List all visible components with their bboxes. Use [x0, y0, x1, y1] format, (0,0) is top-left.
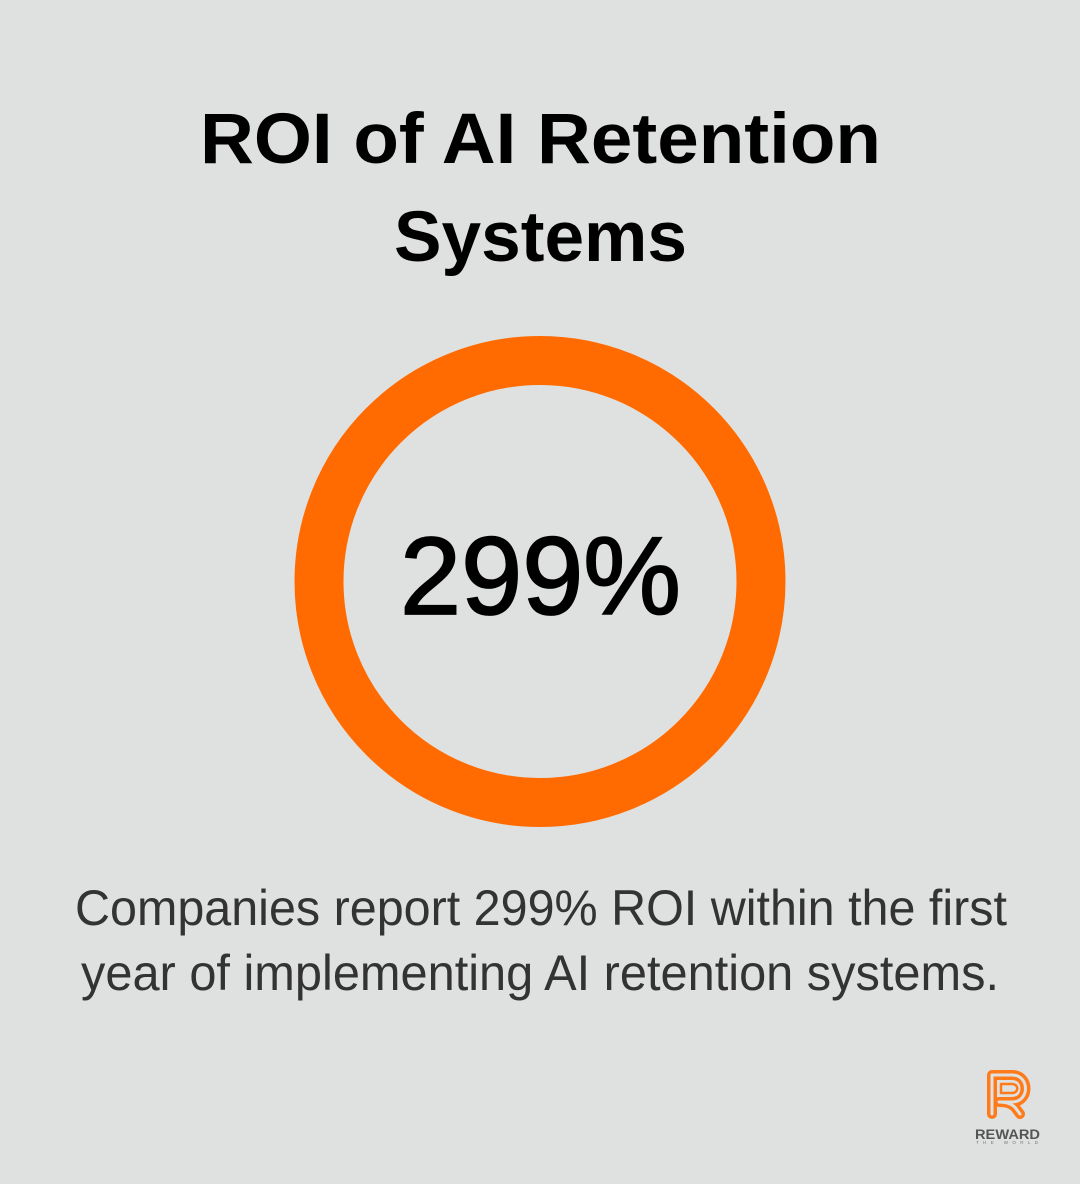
title: ROI of AI Retention [200, 100, 881, 179]
description: Companies report 299% ROI within the first [75, 880, 1007, 936]
title [200, 100, 881, 277]
wordmark: REWARD [975, 1127, 1040, 1142]
tagline: THE WORLD [976, 1140, 1039, 1145]
logo: Reward the World [975, 1075, 1040, 1145]
title: Systems [394, 198, 687, 277]
value: 299%: 299% [400, 515, 681, 638]
icon: R mark [992, 1075, 1026, 1114]
description: year of implementing AI retention systems. [81, 945, 999, 1001]
description [75, 880, 1007, 1001]
donut ring [319, 360, 761, 802]
